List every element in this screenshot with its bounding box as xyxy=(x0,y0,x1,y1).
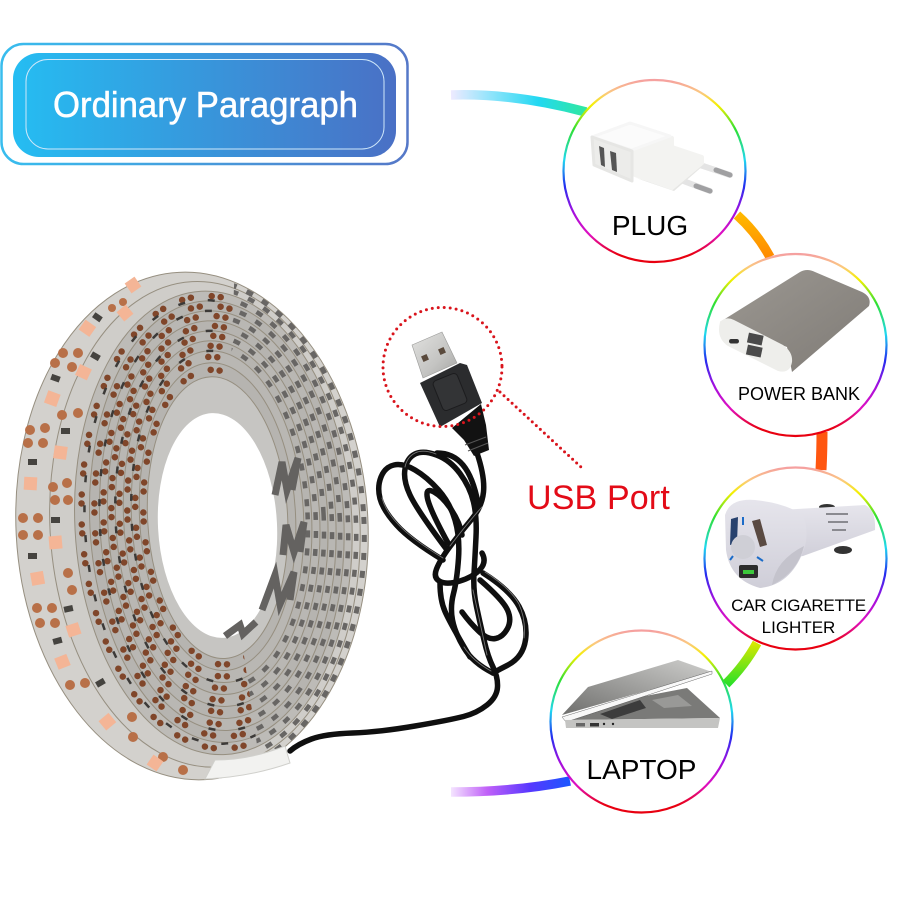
dark resistor components xyxy=(28,312,106,688)
label: LAPTOP: LAPTOP xyxy=(587,754,696,785)
heading text: Ordinary Paragraph xyxy=(53,84,358,125)
circle: plug xyxy=(564,80,746,262)
label: PLUG: PLUG xyxy=(612,210,688,241)
dotted callout circle and leader xyxy=(383,308,582,468)
circle: car cigarette lighter xyxy=(704,468,886,650)
USB metal plug xyxy=(412,332,457,378)
outer band solder pads xyxy=(18,298,188,775)
adhesive tape marks xyxy=(232,283,367,750)
circle: power bank xyxy=(704,254,886,436)
USB connector xyxy=(412,332,489,456)
circle: laptop xyxy=(550,630,732,812)
header badge: Ordinary Paragraph xyxy=(2,44,408,164)
icon: laptop xyxy=(562,660,720,728)
coiled USB cable and power lead xyxy=(290,451,526,751)
label: CAR CIGARETTE LIGHTER: LIGHTER xyxy=(762,618,835,637)
reel centre hole xyxy=(152,410,283,641)
USB strain relief xyxy=(452,404,489,456)
icon: wall plug xyxy=(592,123,730,191)
white end sleeve xyxy=(205,746,290,779)
icon: power bank xyxy=(719,270,870,372)
peach LED chips xyxy=(24,277,163,771)
label: CAR CIGARETTE LIGHTER: CAR CIGARETTE xyxy=(731,596,866,615)
label: POWER BANK: POWER BANK xyxy=(738,384,860,404)
reel bands xyxy=(3,263,381,789)
tape logo marks xyxy=(225,458,304,636)
icon: car charger xyxy=(725,500,875,588)
rainbow connector arcs xyxy=(451,95,822,792)
inner copper solder pads xyxy=(78,292,256,752)
USB black housing xyxy=(420,363,482,427)
label: USB Port: USB Port xyxy=(527,479,670,517)
LED strip reel xyxy=(3,263,381,789)
